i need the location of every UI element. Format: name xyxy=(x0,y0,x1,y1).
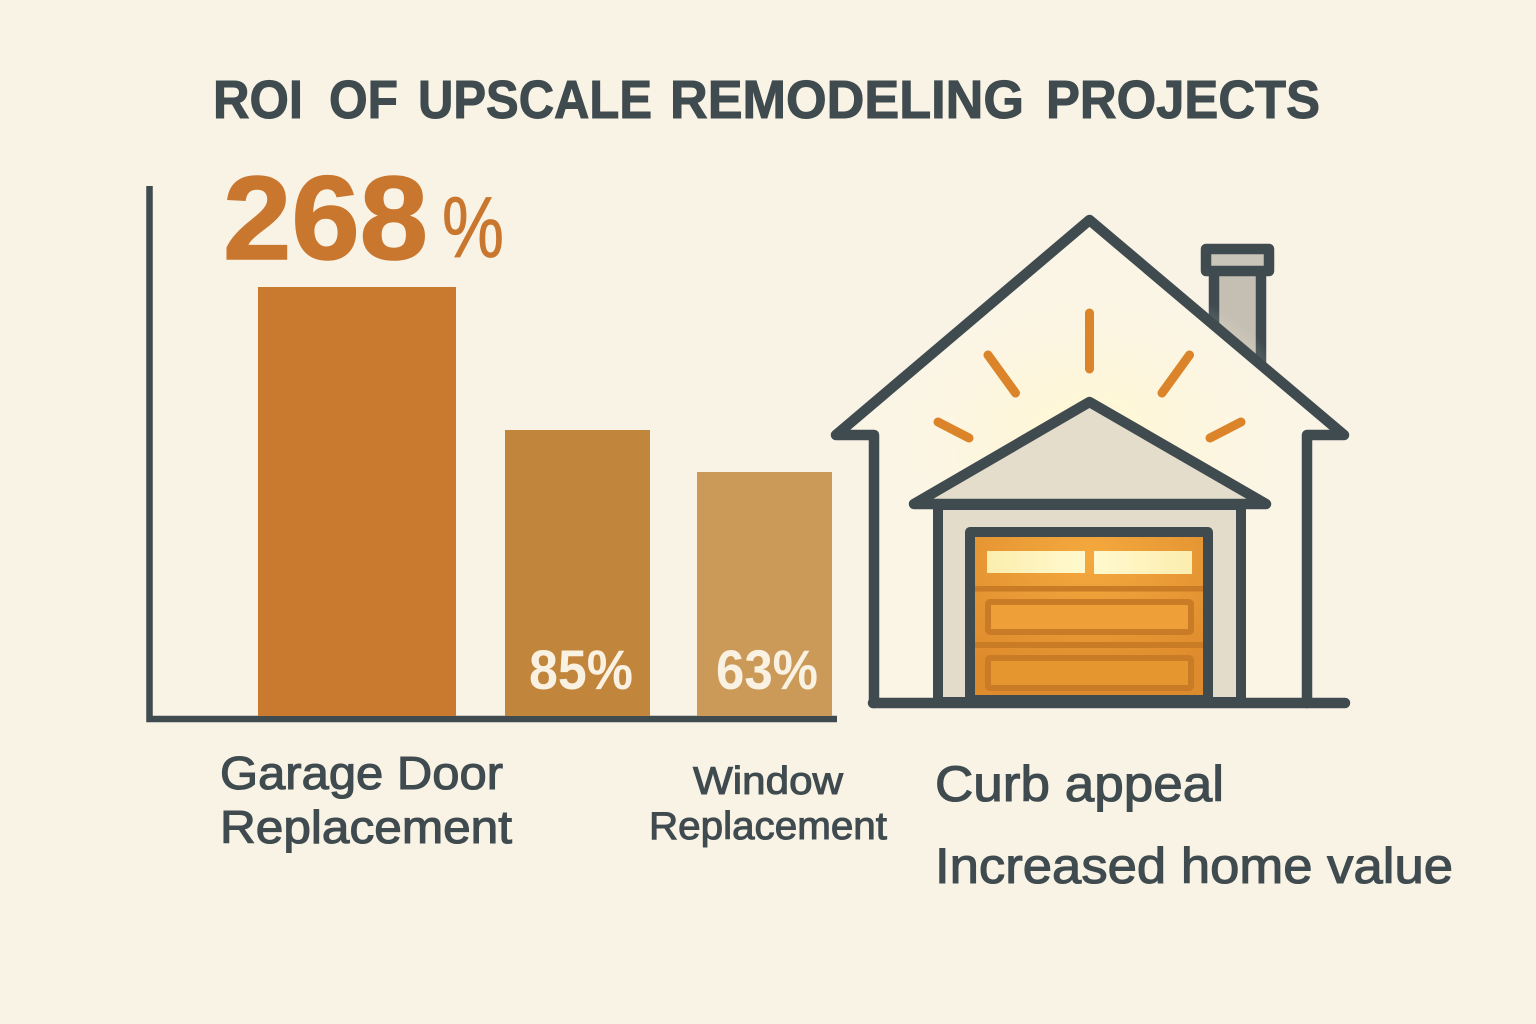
door panel upper xyxy=(988,602,1191,632)
door panel seams xyxy=(975,586,1203,592)
title: REMODELING xyxy=(670,70,1024,130)
chart axes xyxy=(150,186,837,719)
garage wall xyxy=(938,505,1241,702)
garage door xyxy=(970,532,1208,700)
door panel lower xyxy=(988,658,1191,688)
title: ROI xyxy=(213,70,303,130)
light rays xyxy=(938,313,1241,438)
gable xyxy=(914,402,1266,504)
value: 63 percent: 63% xyxy=(716,638,818,701)
title: PROJECTS xyxy=(1046,70,1320,130)
label: window replacement: Replacement xyxy=(649,805,887,848)
benefit: increased home value: Increased home value xyxy=(935,838,1453,894)
bar chart xyxy=(150,152,837,719)
ground line xyxy=(873,698,1345,708)
value: 268 percent: 268 xyxy=(223,152,428,285)
bar: window replacement xyxy=(697,472,832,716)
glow behind gable xyxy=(875,275,1305,605)
title: OF xyxy=(329,70,398,130)
benefit: curb appeal: Curb appeal xyxy=(935,756,1224,812)
house interior xyxy=(836,220,1344,703)
label: window replacement: Window xyxy=(693,760,844,803)
bar: garage door replacement xyxy=(258,287,456,716)
icon: house with glowing garage door xyxy=(836,220,1345,703)
bar: middle project xyxy=(505,430,650,716)
title: UPSCALE xyxy=(418,70,652,130)
label: garage door replacement xyxy=(220,747,512,853)
label: garage door replacement: Garage Door xyxy=(220,747,503,799)
label: window replacement xyxy=(649,760,887,848)
value: 85 percent: 85% xyxy=(529,638,633,701)
value: 268 percent: % xyxy=(442,180,504,276)
house outline xyxy=(836,220,1344,703)
door windows xyxy=(987,551,1085,573)
title xyxy=(213,70,1320,130)
label: garage door replacement: Replacement xyxy=(220,801,512,853)
chimney xyxy=(1206,249,1269,400)
